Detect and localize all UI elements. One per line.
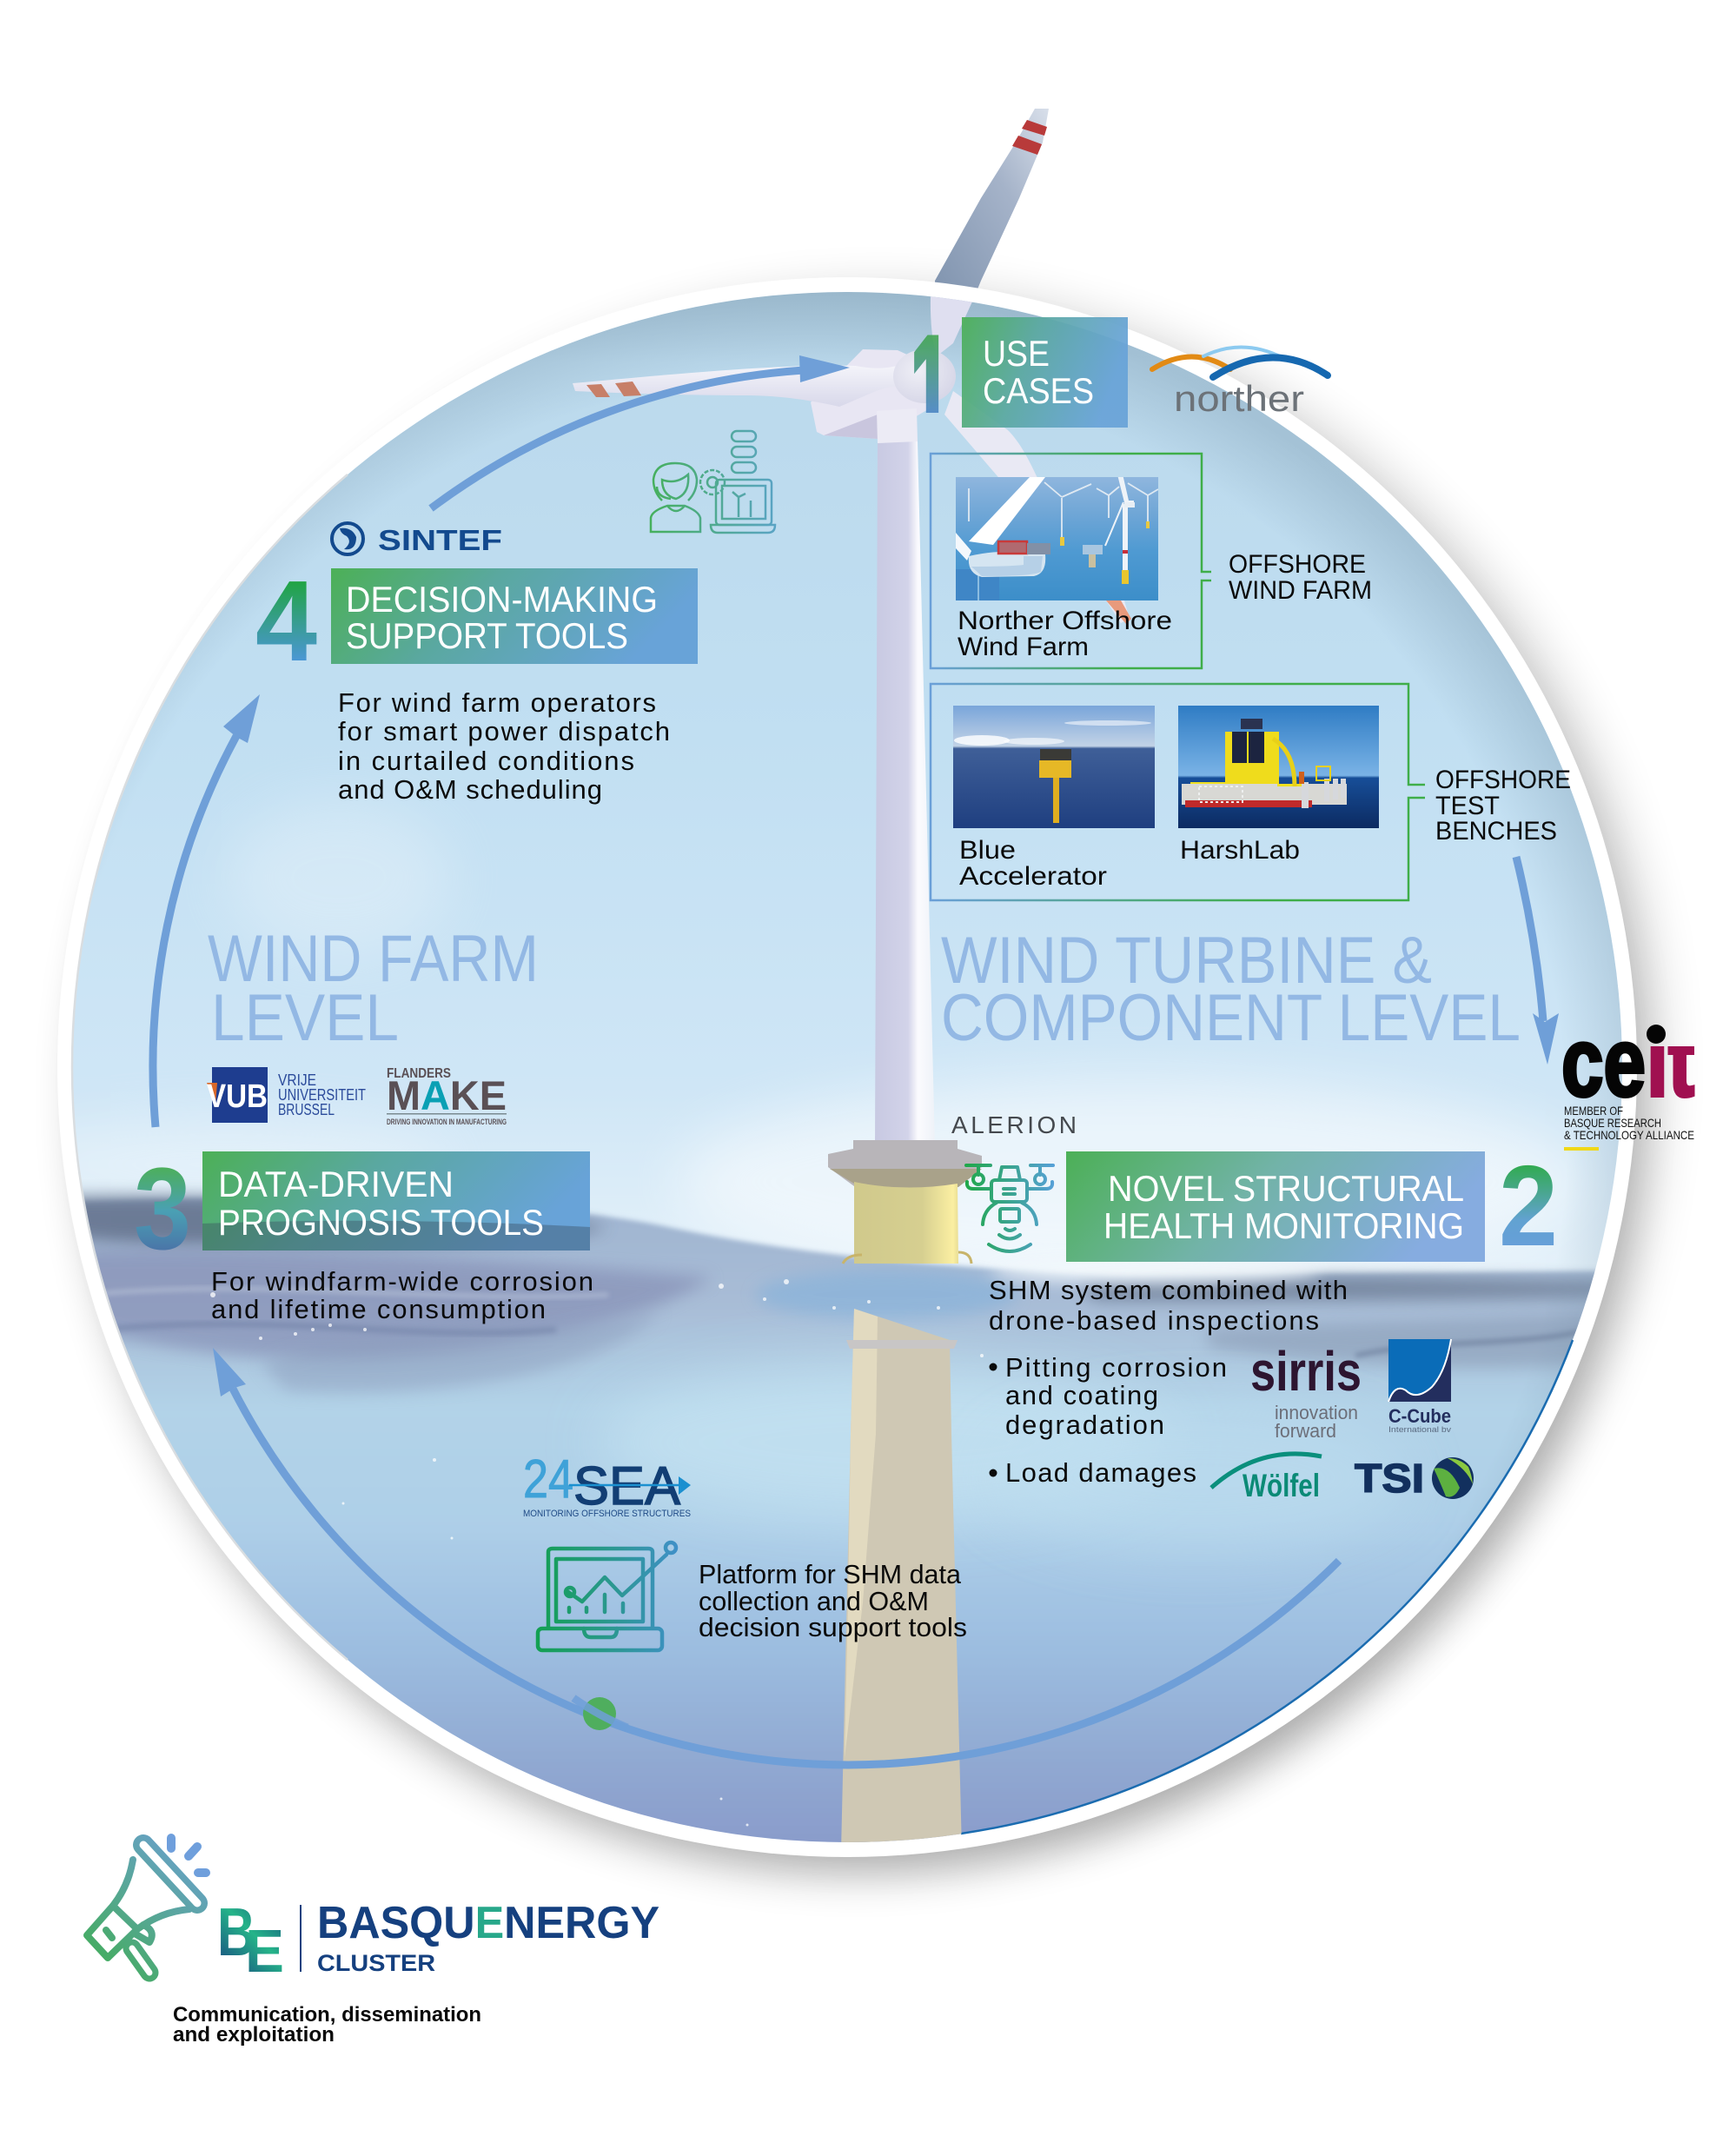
- label: offshore wind farm: WIND FARM: [1229, 576, 1372, 605]
- icon: drone: [966, 1165, 1053, 1251]
- text: decision-making description: For wind farm operators: [338, 687, 656, 718]
- logo: c-cube: [1388, 1339, 1452, 1434]
- heading: wind farm level: [208, 922, 539, 1055]
- logo: sirris: forward: [1275, 1420, 1336, 1442]
- panel: offshore test benches frame: [931, 684, 1425, 900]
- logo: vub: BRUSSEL: [278, 1101, 335, 1118]
- darkened wave across panel: [202, 1221, 590, 1250]
- label: offshore test benches: OFFSHORE: [1435, 766, 1571, 794]
- circle shadow: [76, 283, 1667, 1877]
- thin disk edge: [72, 474, 1573, 1834]
- logo: sirris: [1250, 1340, 1362, 1442]
- label: offshore wind farm: [1229, 550, 1372, 605]
- icon: megaphone: [87, 1838, 206, 1973]
- logo: tsi: [1355, 1456, 1474, 1501]
- heading line 2: PROGNOSIS TOOLS: [218, 1202, 544, 1243]
- logo: sirris: innovation: [1275, 1402, 1358, 1423]
- heading line 1: DATA-DRIVEN: [218, 1164, 454, 1204]
- photo: norther offshore wind farm: [956, 477, 1158, 600]
- logo: ceit: MEMBER OF: [1564, 1104, 1623, 1118]
- arrow: prognosis to decision-making: [153, 694, 260, 1127]
- caption: blue accelerator: Accelerator: [959, 862, 1107, 891]
- list: damage types: and coating: [1005, 1380, 1158, 1410]
- heading: wind turbine and component level: WIND TURBINE &: [941, 924, 1432, 998]
- text: prognosis description: [211, 1266, 593, 1324]
- logo: flanders make: DRIVING INNOVATION IN MANUFACTURING: [387, 1118, 507, 1126]
- flange cone: [830, 1169, 982, 1189]
- logo: vub: [207, 1067, 366, 1123]
- logo: ceit: & TECHNOLOGY ALLIANCE: [1564, 1128, 1694, 1142]
- text: platform description: collection and O&M: [699, 1586, 929, 1616]
- yellow transition piece: [854, 1182, 958, 1264]
- logo: vub: UNIVERSITEIT: [278, 1086, 366, 1104]
- wind turbine: [573, 278, 1131, 1851]
- heading: wind farm level: LEVEL: [211, 981, 399, 1055]
- photo caption: Wind Farm: [958, 633, 1089, 661]
- logo: vub: VUB: [207, 1078, 268, 1115]
- transition piece flange: [828, 1140, 982, 1186]
- panel: decision-making heading: [331, 568, 698, 664]
- boat landing brackets: [843, 1252, 971, 1264]
- text: communication caption: Communication, dissemination: [173, 2003, 481, 2027]
- circle outer ring: [57, 277, 1637, 1857]
- logo: 24sea: MONITORING OFFSHORE STRUCTURES: [523, 1509, 691, 1519]
- use cases label line 2: CASES: [983, 370, 1094, 411]
- wind turbine upper blade: [935, 109, 1049, 300]
- marker dot on arc: [573, 1697, 627, 1730]
- logo: flanders make: MAKE: [387, 1072, 507, 1118]
- heading line 1: NOVEL STRUCTURAL: [1108, 1168, 1464, 1209]
- text: shm description: drone-based inspections: [989, 1305, 1319, 1336]
- logo: norther: [1152, 347, 1328, 419]
- caption: blue accelerator: [959, 836, 1107, 891]
- number 2: 2: [1499, 1142, 1558, 1270]
- number 1: 1: [911, 307, 951, 467]
- underwater light side: [845, 1309, 878, 1758]
- arrow: decision-making to use cases: [431, 355, 850, 508]
- logo: wolfel: [1211, 1454, 1322, 1503]
- list: damage types: [989, 1352, 1227, 1488]
- icon: laptop platform: [538, 1542, 676, 1650]
- text: decision-making description: for smart power dispatch: [338, 716, 670, 746]
- heading line 1: DECISION-MAKING: [346, 579, 658, 620]
- tower: [875, 441, 935, 1147]
- logo: basquenergy cluster: B: [217, 1894, 255, 1970]
- logo: 24sea: [523, 1449, 691, 1519]
- label: offshore test benches: TEST: [1435, 792, 1500, 820]
- text: communication caption: and exploitation: [173, 2023, 335, 2047]
- text: platform description: decision support tools: [699, 1612, 967, 1642]
- logo: vub: VRIJE: [278, 1071, 316, 1089]
- photo caption: Norther Offshore: [958, 607, 1172, 635]
- logo: sintef: [332, 523, 502, 556]
- logo: sintef: SINTEF: [378, 524, 502, 556]
- list: damage types: Load damages: [1005, 1457, 1196, 1488]
- photo: blue accelerator: [953, 706, 1155, 828]
- icon: operator with laptop: [651, 431, 775, 533]
- lower right blade: [944, 391, 1130, 623]
- heading line 2: HEALTH MONITORING: [1103, 1205, 1464, 1246]
- logo: norther: norther: [1174, 378, 1304, 419]
- text: prognosis description: For windfarm-wide corrosion: [211, 1266, 593, 1297]
- heading line 2: SUPPORT TOOLS: [346, 615, 628, 656]
- list: damage types: Pitting corrosion: [1005, 1352, 1227, 1383]
- panel: offshore wind farm frame: [931, 454, 1211, 668]
- use cases label: USE: [983, 333, 1050, 374]
- logo: c-cube: C-Cube: [1388, 1405, 1451, 1427]
- logo: alerion: ALERION: [951, 1111, 1077, 1138]
- text: decision-making description: [338, 687, 670, 805]
- text: communication caption: [173, 2003, 481, 2047]
- list: damage types: degradation: [1005, 1410, 1164, 1440]
- nacelle shade: [824, 415, 878, 439]
- left blade: [573, 366, 897, 407]
- text: shm description: SHM system combined with: [989, 1275, 1348, 1305]
- red blade marks: [586, 381, 641, 397]
- logo: ceit: it: [1647, 1008, 1694, 1117]
- hub: [893, 349, 956, 403]
- number 4: 4: [255, 557, 317, 685]
- panel: sky and sea disk: [73, 292, 1622, 1842]
- text: prognosis description: and lifetime consumption: [211, 1294, 546, 1324]
- logo: 24sea: SEA: [573, 1456, 681, 1516]
- upper blade inside disk: [930, 296, 972, 353]
- label: offshore test benches: BENCHES: [1435, 817, 1557, 846]
- text: decision-making description: and O&M scheduling: [338, 774, 602, 805]
- text: decision-making description: in curtailed conditions: [338, 746, 634, 776]
- label: offshore test benches: [1435, 766, 1571, 846]
- red blade tip: [1106, 600, 1131, 624]
- text: platform description: [699, 1559, 967, 1642]
- panel: prognosis heading: [202, 1151, 590, 1250]
- logo: ceit: BASQUE RESEARCH: [1564, 1116, 1661, 1130]
- tower collar: [877, 415, 918, 443]
- logo: c-cube: International bv: [1388, 1425, 1452, 1434]
- heading: wind farm level: WIND FARM: [208, 922, 539, 996]
- arrow: monitoring to prognosis tools: [213, 1348, 1339, 1765]
- arrow: use cases to structural health monitoring: [1516, 857, 1559, 1065]
- foundation collar: [846, 1340, 958, 1349]
- heading: wind turbine and component level: [941, 924, 1521, 1055]
- caption: blue accelerator: Blue: [959, 836, 1016, 865]
- logo: ceit: [1561, 1008, 1694, 1151]
- logo: flanders make: FLANDERS: [387, 1066, 451, 1081]
- logo: basquenergy cluster: BASQUENERGY: [317, 1898, 659, 1948]
- caption: harshlab: HarshLab: [1180, 836, 1300, 865]
- label: offshore wind farm: OFFSHORE: [1229, 550, 1366, 579]
- panel: structural health monitoring heading: [1066, 1151, 1485, 1262]
- logo: ceit: ce: [1561, 1008, 1646, 1117]
- heading: wind turbine and component level: COMPONENT LEVEL: [941, 981, 1521, 1055]
- text: platform description: Platform for SHM data: [699, 1559, 962, 1589]
- text: shm description: [989, 1275, 1348, 1336]
- logo: tsi: TSI: [1355, 1456, 1424, 1501]
- logo: basquenergy cluster: [217, 1894, 659, 1985]
- nacelle: [811, 349, 930, 439]
- logo: 24sea: 24: [523, 1449, 573, 1509]
- panel: use cases heading: [962, 317, 1128, 428]
- logo: sirris: sirris: [1250, 1340, 1362, 1403]
- photo caption: [958, 607, 1172, 661]
- photo: harshlab: [1178, 706, 1379, 828]
- number 3: 3: [134, 1144, 191, 1274]
- logo: basquenergy cluster: CLUSTER: [317, 1950, 435, 1976]
- underwater foundation: [841, 1309, 962, 1851]
- logo: basquenergy cluster: E: [245, 1917, 284, 1985]
- logo: wolfel: Wölfel: [1243, 1468, 1320, 1503]
